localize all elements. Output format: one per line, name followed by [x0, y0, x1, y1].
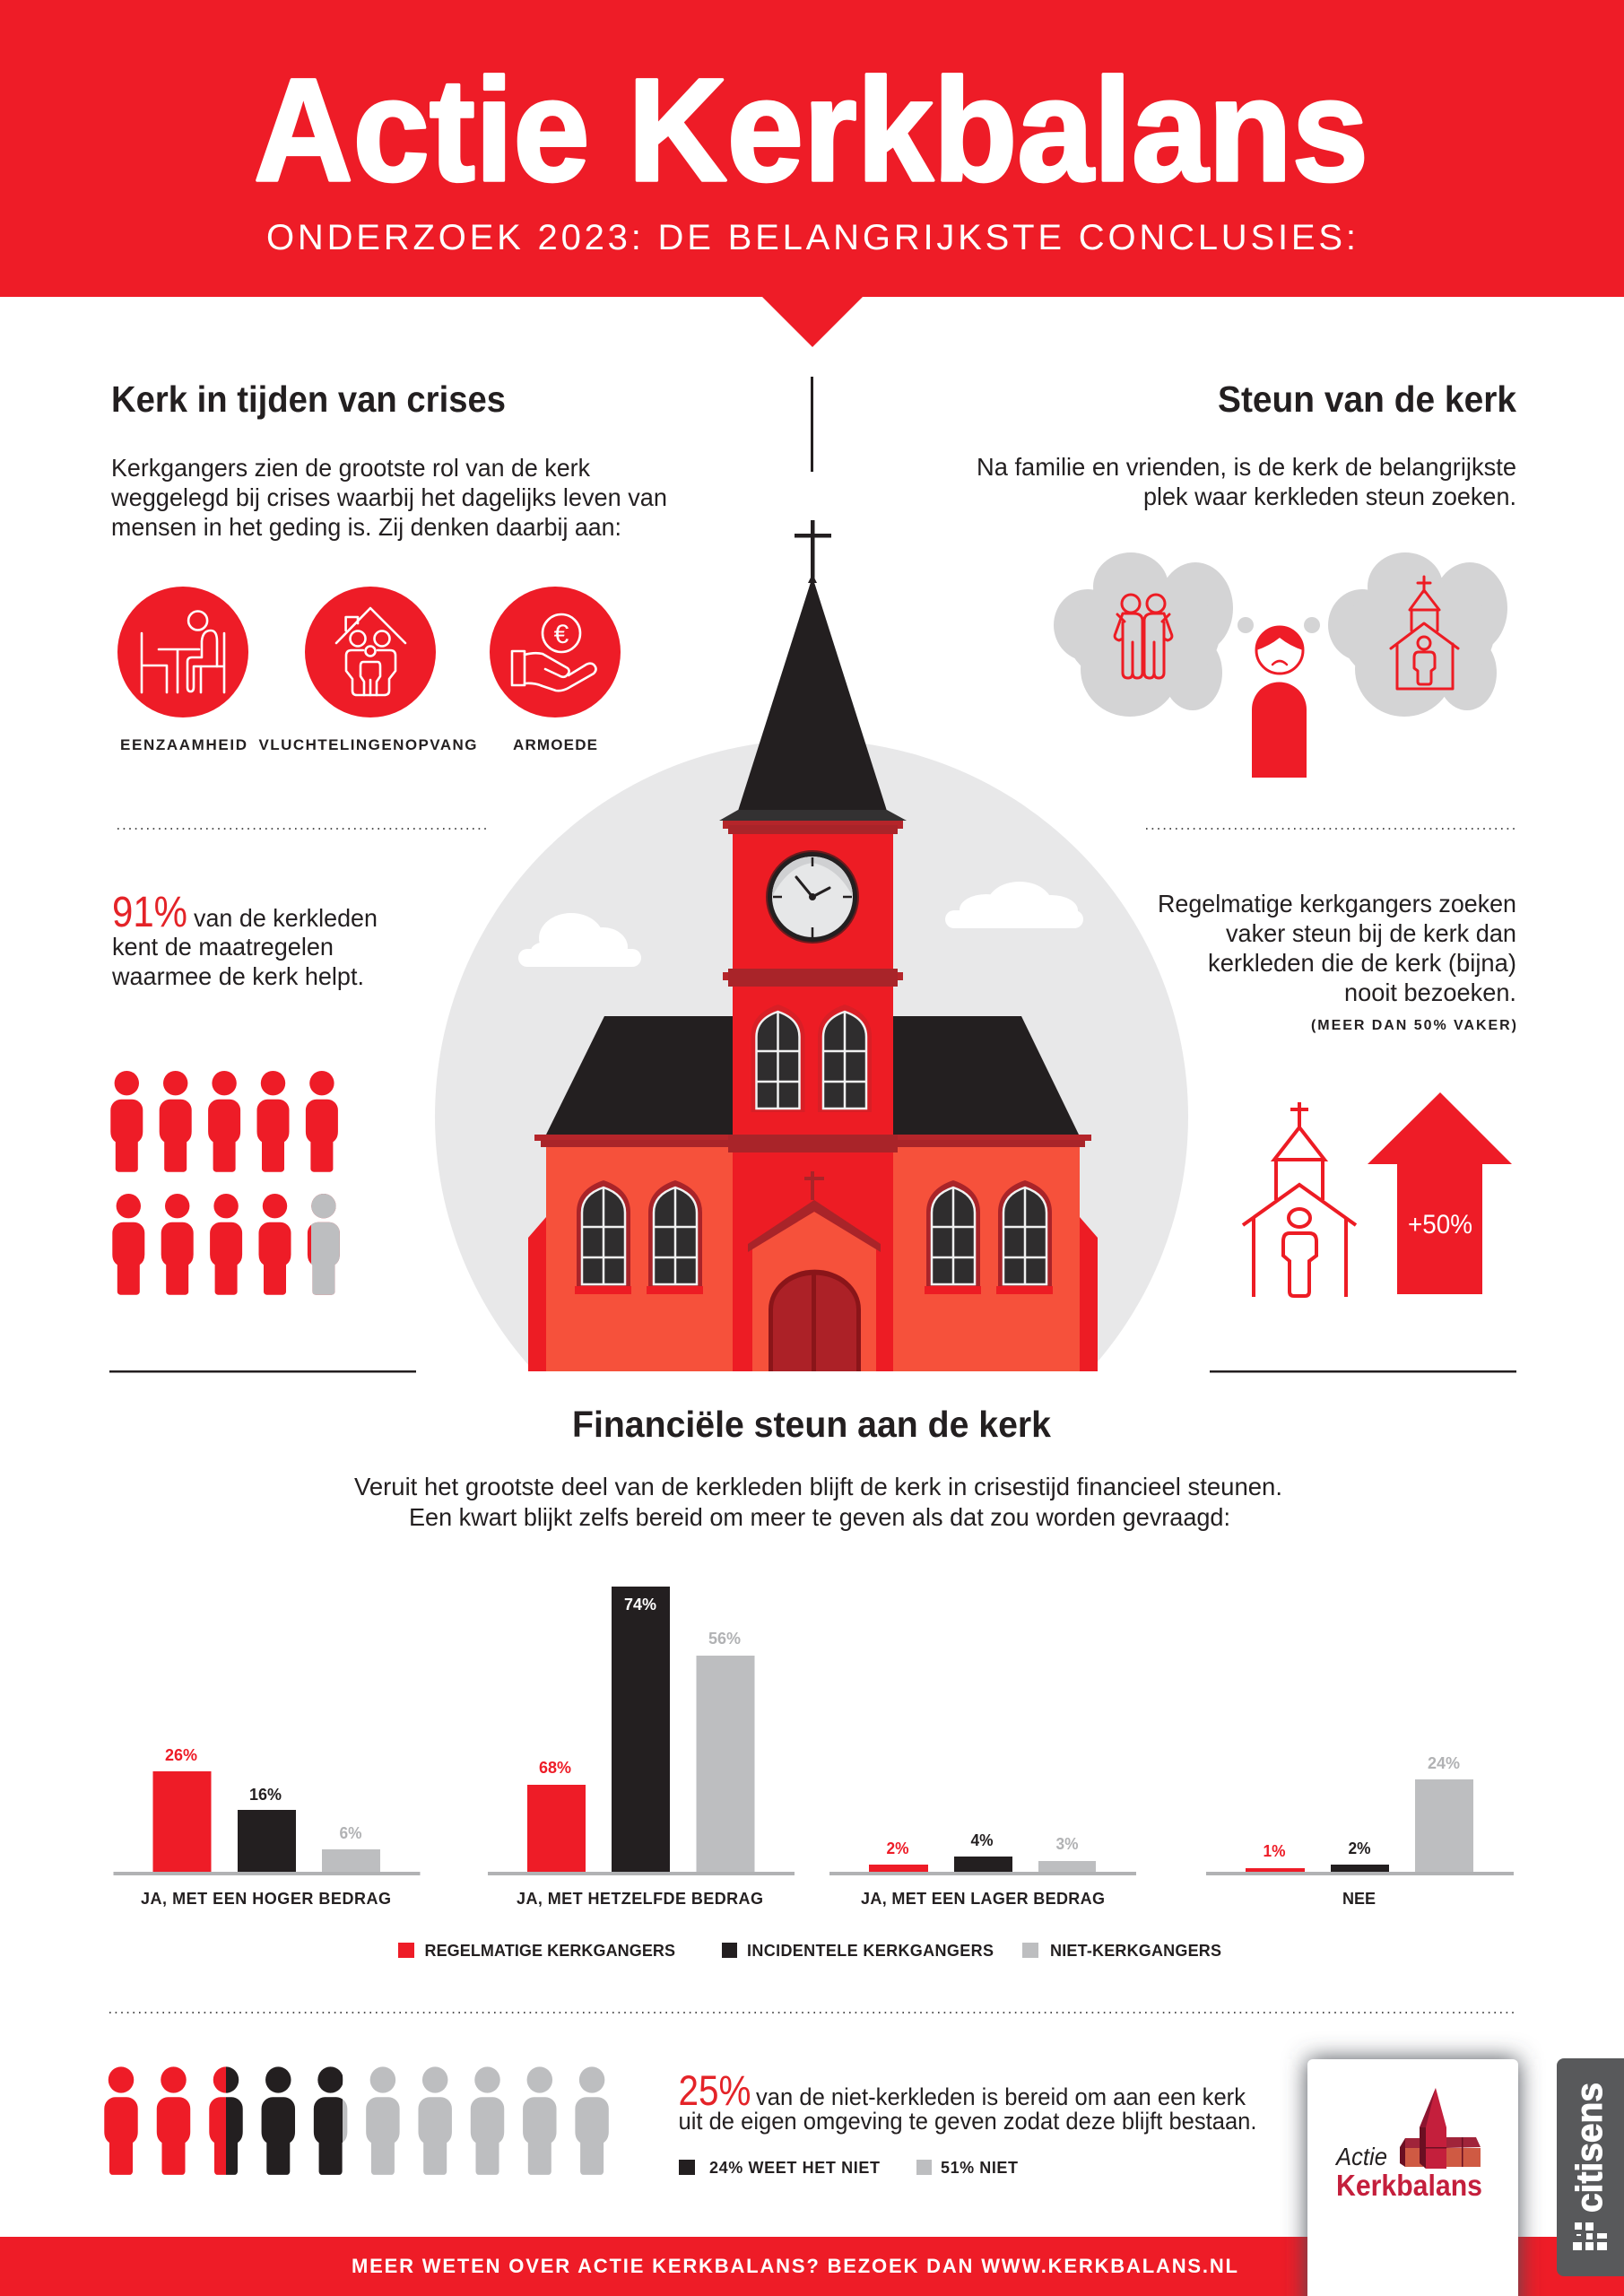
text block: vaker steun bij de kerk dan	[1226, 919, 1516, 947]
text block: kerkleden die de kerk (bijna)	[1208, 949, 1516, 977]
icon: thought cloud family	[1054, 552, 1233, 717]
legend	[398, 1942, 1221, 1960]
panel: kerk in tijden van crises	[110, 378, 667, 753]
stat text: waarmee de kerk helpt.	[111, 962, 364, 990]
icon: eenzaamheid	[117, 587, 248, 718]
spire and cross	[719, 520, 907, 821]
intro text: Veruit het grootste deel van de kerkleden blijft de kerk in crisestijd financieel steunen.	[354, 1473, 1282, 1500]
thought dots	[1238, 617, 1320, 633]
group: ja met een hoger bedrag: 16%	[249, 1786, 282, 1804]
note: (MEER DAN 50% VAKER)	[1311, 1018, 1516, 1033]
intro text: Na familie en vrienden, is de kerk de belangrijkste	[977, 453, 1516, 481]
legend: REGELMATIGE KERKGANGERS	[425, 1942, 675, 1960]
pictogram: 10 people	[110, 1071, 340, 1295]
label: armoede: ARMOEDE	[513, 736, 597, 753]
group: ja met een lager bedrag: JA, MET EEN LAGER BEDRAG	[861, 1890, 1105, 1908]
intro text: mensen in het geding is. Zij denken daarbij aan:	[111, 513, 621, 541]
header banner	[0, 0, 1624, 347]
nave	[528, 1016, 1098, 1371]
ground line left	[109, 1370, 416, 1372]
group: nee	[1206, 1754, 1514, 1908]
bar chart	[113, 1587, 1514, 1908]
group: nee: 24%	[1428, 1754, 1460, 1772]
group: ja met hetzelfde bedrag: 74%	[624, 1596, 656, 1613]
arrow +50%	[1368, 1092, 1512, 1294]
stat text: van de kerkleden	[194, 904, 378, 932]
nave windows	[575, 1180, 1053, 1294]
arrow label: +50%	[1408, 1210, 1472, 1239]
ground line right	[1210, 1370, 1516, 1372]
stat text: uit de eigen omgeving te geven zodat deze blijft bestaan.	[678, 2108, 1257, 2135]
icon: sad person	[1252, 627, 1307, 778]
heading: Financiële steun aan de kerk	[572, 1404, 1051, 1445]
group: ja met een hoger bedrag: JA, MET EEN HOGER BEDRAG	[141, 1890, 391, 1908]
panel: 91 procent	[110, 889, 378, 1295]
legend: NIET-KERKGANGERS	[1050, 1942, 1221, 1960]
heading: Steun van de kerk	[1218, 378, 1516, 420]
group: nee: NEE	[1342, 1890, 1376, 1908]
group: ja met een hoger bedrag: 6%	[339, 1824, 362, 1842]
subtitle: ONDERZOEK 2023: DE BELANGRIJKSTE CONCLUSIES:	[266, 218, 1356, 257]
pictogram: 10 people split	[104, 2066, 609, 2175]
logo church	[1400, 2088, 1481, 2169]
legend	[679, 2159, 1018, 2177]
panel: financiele steun	[113, 1404, 1514, 1960]
footer text: MEER WETEN OVER ACTIE KERKBALANS? BEZOEK DAN WWW.KERKBALANS.NL	[352, 2255, 1238, 2277]
tower windows	[751, 1004, 872, 1112]
icon: thought cloud church	[1328, 552, 1507, 717]
intro text	[977, 453, 1516, 510]
panel: regelmatige kerkgangers	[1158, 890, 1516, 1297]
stat 91%: 91%	[112, 889, 187, 936]
porch and door	[748, 1171, 881, 1371]
group: ja met een hoger bedrag: 26%	[165, 1746, 197, 1764]
icon: church with person	[1243, 1102, 1356, 1297]
stat text: kent de maatregelen	[112, 933, 334, 961]
text block: nooit bezoeken.	[1344, 978, 1516, 1006]
group: ja met hetzelfde bedrag	[488, 1587, 795, 1908]
logo text actie: Actie	[1334, 2143, 1387, 2170]
illustration: church	[435, 520, 1188, 1371]
center divider line	[811, 377, 813, 472]
group: ja met een lager bedrag: 3%	[1056, 1835, 1078, 1853]
group: nee: 1%	[1263, 1842, 1286, 1860]
citisens icons	[1573, 2222, 1607, 2250]
intro text	[354, 1473, 1282, 1531]
legend: 24% WEET HET NIET	[709, 2159, 880, 2177]
stat 25%: 25%	[678, 2066, 751, 2114]
group: ja met hetzelfde bedrag: 68%	[539, 1759, 571, 1777]
logo text kerkbalans: Kerkbalans	[1336, 2169, 1482, 2202]
title: Actie Kerkbalans	[254, 48, 1368, 212]
group: ja met een lager bedrag: 4%	[970, 1831, 994, 1849]
icon: armoede	[490, 587, 621, 718]
intro text: Kerkgangers zien de grootste rol van de kerk	[111, 454, 590, 482]
text block	[1158, 890, 1516, 1006]
stat text	[678, 2083, 1257, 2135]
euro sign: €	[554, 620, 569, 649]
text block: Regelmatige kerkgangers zoeken	[1158, 890, 1516, 918]
logo card	[1307, 2059, 1518, 2296]
intro text	[110, 454, 667, 541]
backdrop circle	[435, 744, 1188, 1365]
group: nee: 2%	[1349, 1839, 1370, 1857]
group: ja met hetzelfde bedrag: 56%	[708, 1630, 741, 1648]
label: vluchtelingenopvang: VLUCHTELINGENOPVANG	[258, 736, 477, 753]
intro text: weggelegd bij crises waarbij het dagelijks leven van	[110, 483, 667, 511]
heading: Kerk in tijden van crises	[111, 378, 506, 420]
clock	[767, 851, 858, 943]
tower	[723, 821, 903, 1371]
legend: INCIDENTELE KERKGANGERS	[747, 1942, 994, 1960]
legend: 51% NIET	[941, 2159, 1018, 2177]
group: ja met een lager bedrag: 2%	[886, 1839, 909, 1857]
stat text	[111, 904, 378, 990]
intro text: plek waar kerkleden steun zoeken.	[1143, 483, 1516, 510]
intro text: Een kwart blijkt zelfs bereid om meer te geven als dat zou worden gevraagd:	[409, 1503, 1230, 1531]
icon: vluchtelingenopvang	[305, 587, 436, 718]
cloud left	[518, 913, 641, 967]
stat text: van de niet-kerkleden is bereid om aan een kerk	[756, 2083, 1246, 2110]
group: ja met een lager bedrag	[829, 1831, 1136, 1908]
label: eenzaamheid: EENZAAMHEID	[120, 736, 247, 753]
cloud right	[945, 882, 1083, 928]
group: ja met een hoger bedrag	[113, 1746, 420, 1908]
panel: steun van de kerk	[977, 378, 1516, 778]
group: ja met hetzelfde bedrag: JA, MET HETZELFDE BEDRAG	[517, 1890, 763, 1908]
citisens tab	[1557, 2058, 1624, 2276]
citisens wordmark: citisens	[1568, 2083, 1610, 2213]
panel: niet-kerkleden	[104, 2066, 1256, 2177]
footer bar	[0, 2237, 1624, 2296]
